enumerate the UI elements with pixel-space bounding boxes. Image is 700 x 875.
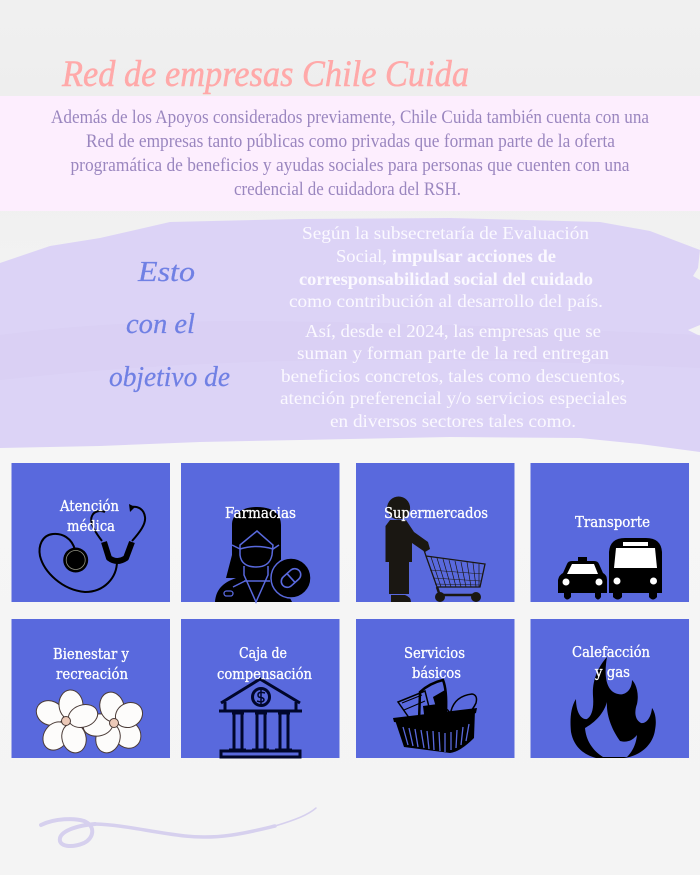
label bbox=[59, 499, 119, 535]
icon: flame bbox=[571, 657, 656, 758]
script text: objective: Esto bbox=[137, 257, 195, 288]
text: benefits statement bbox=[280, 321, 627, 431]
intro text: Red de empresas tanto públicas como privadas que forman parte de la oferta bbox=[86, 132, 615, 152]
text: subsecretaría statement bbox=[289, 223, 603, 311]
label: Calefacción bbox=[572, 645, 650, 661]
label: recreación bbox=[56, 667, 128, 683]
label bbox=[53, 647, 130, 683]
icon: pharmacist bbox=[215, 507, 311, 602]
title: Red de empresas Chile Cuida bbox=[61, 54, 469, 95]
card: Calefacción y gas bbox=[530, 619, 689, 758]
text: benefits statement: en diversos sectores tales como. bbox=[330, 411, 576, 431]
script text: objective: con el bbox=[126, 309, 195, 340]
text: benefits statement: atención preferencial y/o servicios especiales bbox=[280, 388, 627, 408]
script text: objective: objetivo de bbox=[109, 362, 230, 393]
decorative brush squiggle bbox=[41, 808, 316, 846]
icon: bank bbox=[219, 679, 302, 757]
panel: lavender brush stroke bbox=[0, 218, 700, 452]
card: Servicios básicos bbox=[356, 619, 514, 758]
icon: shopper with cart bbox=[386, 496, 485, 602]
label: y gas bbox=[594, 665, 630, 681]
icon: grocery basket bbox=[393, 680, 477, 753]
text: benefits statement: suman y forman parte de la red entregan bbox=[297, 343, 609, 363]
label: Supermercados bbox=[384, 506, 488, 522]
label: Caja de bbox=[239, 646, 287, 662]
text: benefits statement: Así, desde el 2024, las empresas que se bbox=[305, 321, 601, 341]
brush shading bbox=[0, 321, 700, 380]
label: Atención bbox=[59, 499, 119, 515]
card: Transporte bbox=[530, 463, 689, 602]
label bbox=[572, 645, 650, 681]
label: Farmacias bbox=[225, 506, 296, 522]
icon: taxi and bus bbox=[558, 538, 662, 600]
script text: objective bbox=[109, 257, 230, 393]
icon: flowers bbox=[32, 689, 147, 756]
card: Farmacias bbox=[181, 463, 340, 602]
label: básicos bbox=[412, 666, 461, 682]
text: subsecretaría statement: Social, impulsar acciones de bbox=[336, 246, 556, 266]
label: médica bbox=[67, 519, 115, 535]
intro text bbox=[51, 108, 649, 200]
text: subsecretaría statement: Según la subsecretaría de Evaluación bbox=[302, 223, 589, 243]
label bbox=[217, 646, 312, 683]
intro text: programática de beneficios y ayudas sociales para personas que cuenten con una bbox=[70, 156, 630, 176]
label: Bienestar y bbox=[53, 647, 130, 663]
card: Atención médica bbox=[12, 463, 170, 602]
card: Caja de compensación bbox=[181, 619, 340, 758]
panel: introduction band bbox=[0, 96, 700, 211]
icon: stethoscope bbox=[40, 504, 145, 592]
card: Supermercados bbox=[356, 463, 514, 602]
intro text: Además de los Apoyos considerados previamente, Chile Cuida también cuenta con una bbox=[51, 108, 649, 128]
label: Servicios bbox=[404, 646, 465, 662]
label: compensación bbox=[217, 667, 312, 683]
label: Transporte bbox=[575, 515, 650, 531]
text: subsecretaría statement: como contribución al desarrollo del país. bbox=[289, 291, 603, 311]
text: subsecretaría statement: corresponsabilidad social del cuidado bbox=[299, 269, 593, 289]
label bbox=[404, 646, 465, 682]
intro text: credencial de cuidadora del RSH. bbox=[234, 180, 461, 200]
card: Bienestar y recreación bbox=[12, 619, 170, 758]
text: benefits statement: beneficios concretos, tales como descuentos, bbox=[281, 366, 625, 386]
